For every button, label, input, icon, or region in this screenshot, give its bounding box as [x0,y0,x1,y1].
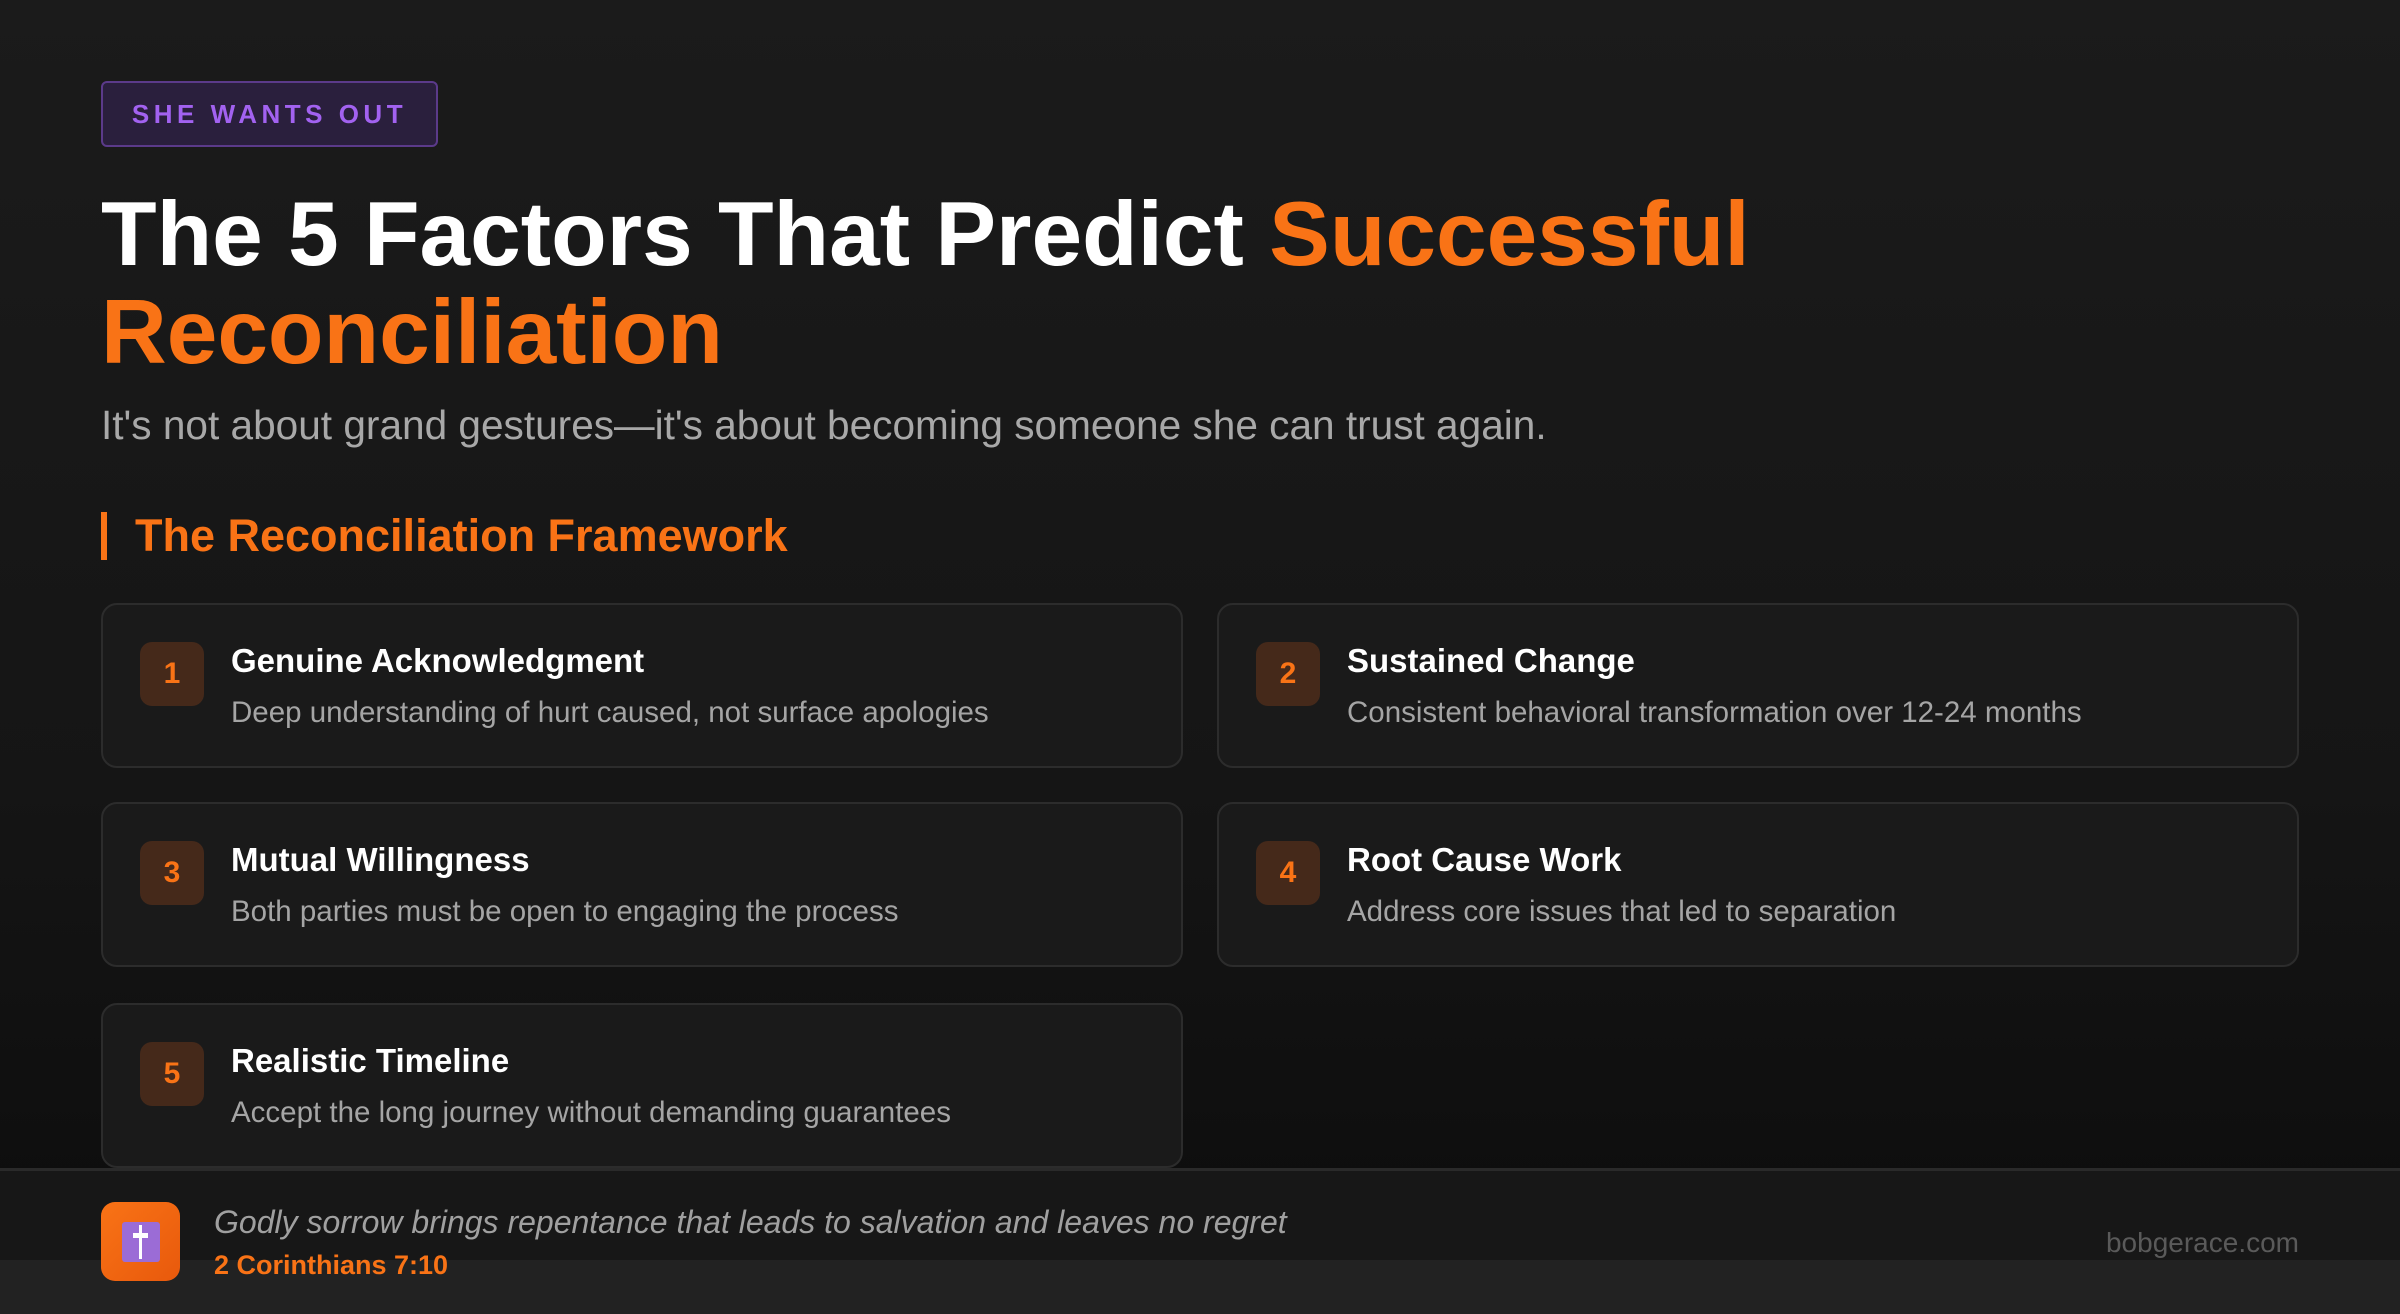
card 1 [101,603,1183,768]
card 2: Consistent behavioral transformation over 12-24 months [1347,696,2082,729]
card 4: Address core issues that led to separation [1347,895,1896,928]
card 4: Root Cause Work [1347,841,1621,878]
quote: Godly sorrow brings repentance that leads to salvation and leaves no regret [214,1204,1287,1240]
title [101,184,1750,383]
card 2 [1217,603,2299,768]
tag badge: SHE WANTS OUT [132,98,407,128]
title: The 5 Factors That Predict Successful [101,184,1750,285]
section heading: The Reconciliation Framework [135,510,788,561]
card 4: 4 [1280,856,1296,889]
icon: cross [101,1202,180,1281]
card 3 [101,802,1183,967]
footer band [0,1168,2400,1260]
reference: 2 Corinthians 7:10 [214,1250,448,1280]
card 2: Sustained Change [1347,642,1635,679]
card 1: 1 [164,657,180,690]
card 5: Realistic Timeline [231,1042,509,1079]
site credit: bobgerace.com [2106,1227,2299,1258]
card 3: Mutual Willingness [231,841,530,878]
title: Reconciliation [101,282,723,383]
card 1: Genuine Acknowledgment [231,642,644,679]
card 5 [101,1003,1183,1168]
card 3: 3 [164,856,180,889]
card 1: Deep understanding of hurt caused, not surface apologies [231,696,989,729]
subtitle: It's not about grand gestures—it's about becoming someone she can trust again. [101,402,1547,448]
tag badge [101,81,438,147]
card 2: 2 [1280,657,1296,690]
card 3: Both parties must be open to engaging the process [231,895,898,928]
card 5: Accept the long journey without demanding guarantees [231,1096,951,1129]
card 4 [1217,802,2299,967]
card 5: 5 [164,1057,180,1090]
